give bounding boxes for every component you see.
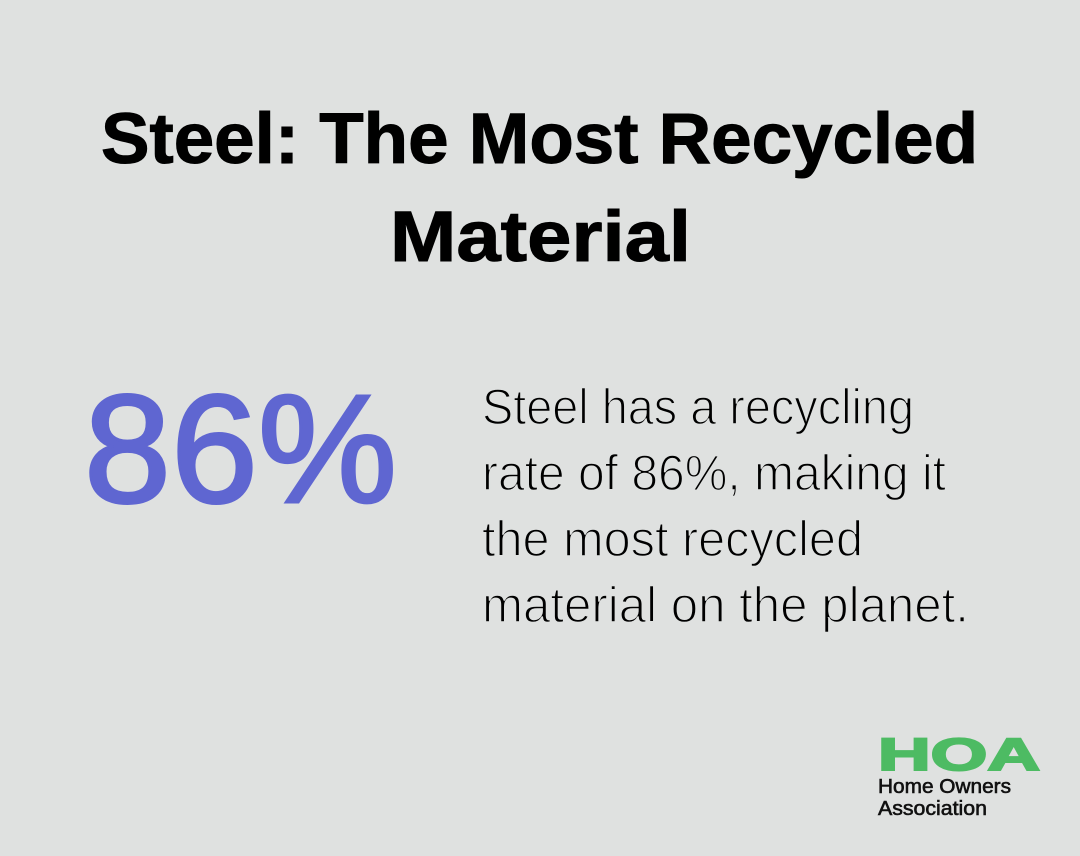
description text bbox=[482, 379, 969, 633]
logo wordmark: HOA bbox=[878, 729, 1040, 780]
title bbox=[101, 100, 978, 277]
description text: material on the planet. bbox=[482, 577, 969, 633]
logo caption: Association bbox=[878, 798, 987, 820]
title: Steel: The Most Recycled bbox=[101, 100, 978, 179]
title: Material bbox=[390, 198, 691, 277]
big statistic: 86%: 86% bbox=[84, 363, 397, 535]
description text: Steel has a recycling bbox=[482, 379, 914, 435]
logo: HOA Home Owners Association bbox=[878, 729, 1040, 820]
logo caption: Home Owners bbox=[878, 776, 1011, 798]
logo caption bbox=[878, 776, 1011, 820]
description text: the most recycled bbox=[482, 511, 863, 567]
description text: rate of 86%, making it bbox=[482, 445, 946, 501]
